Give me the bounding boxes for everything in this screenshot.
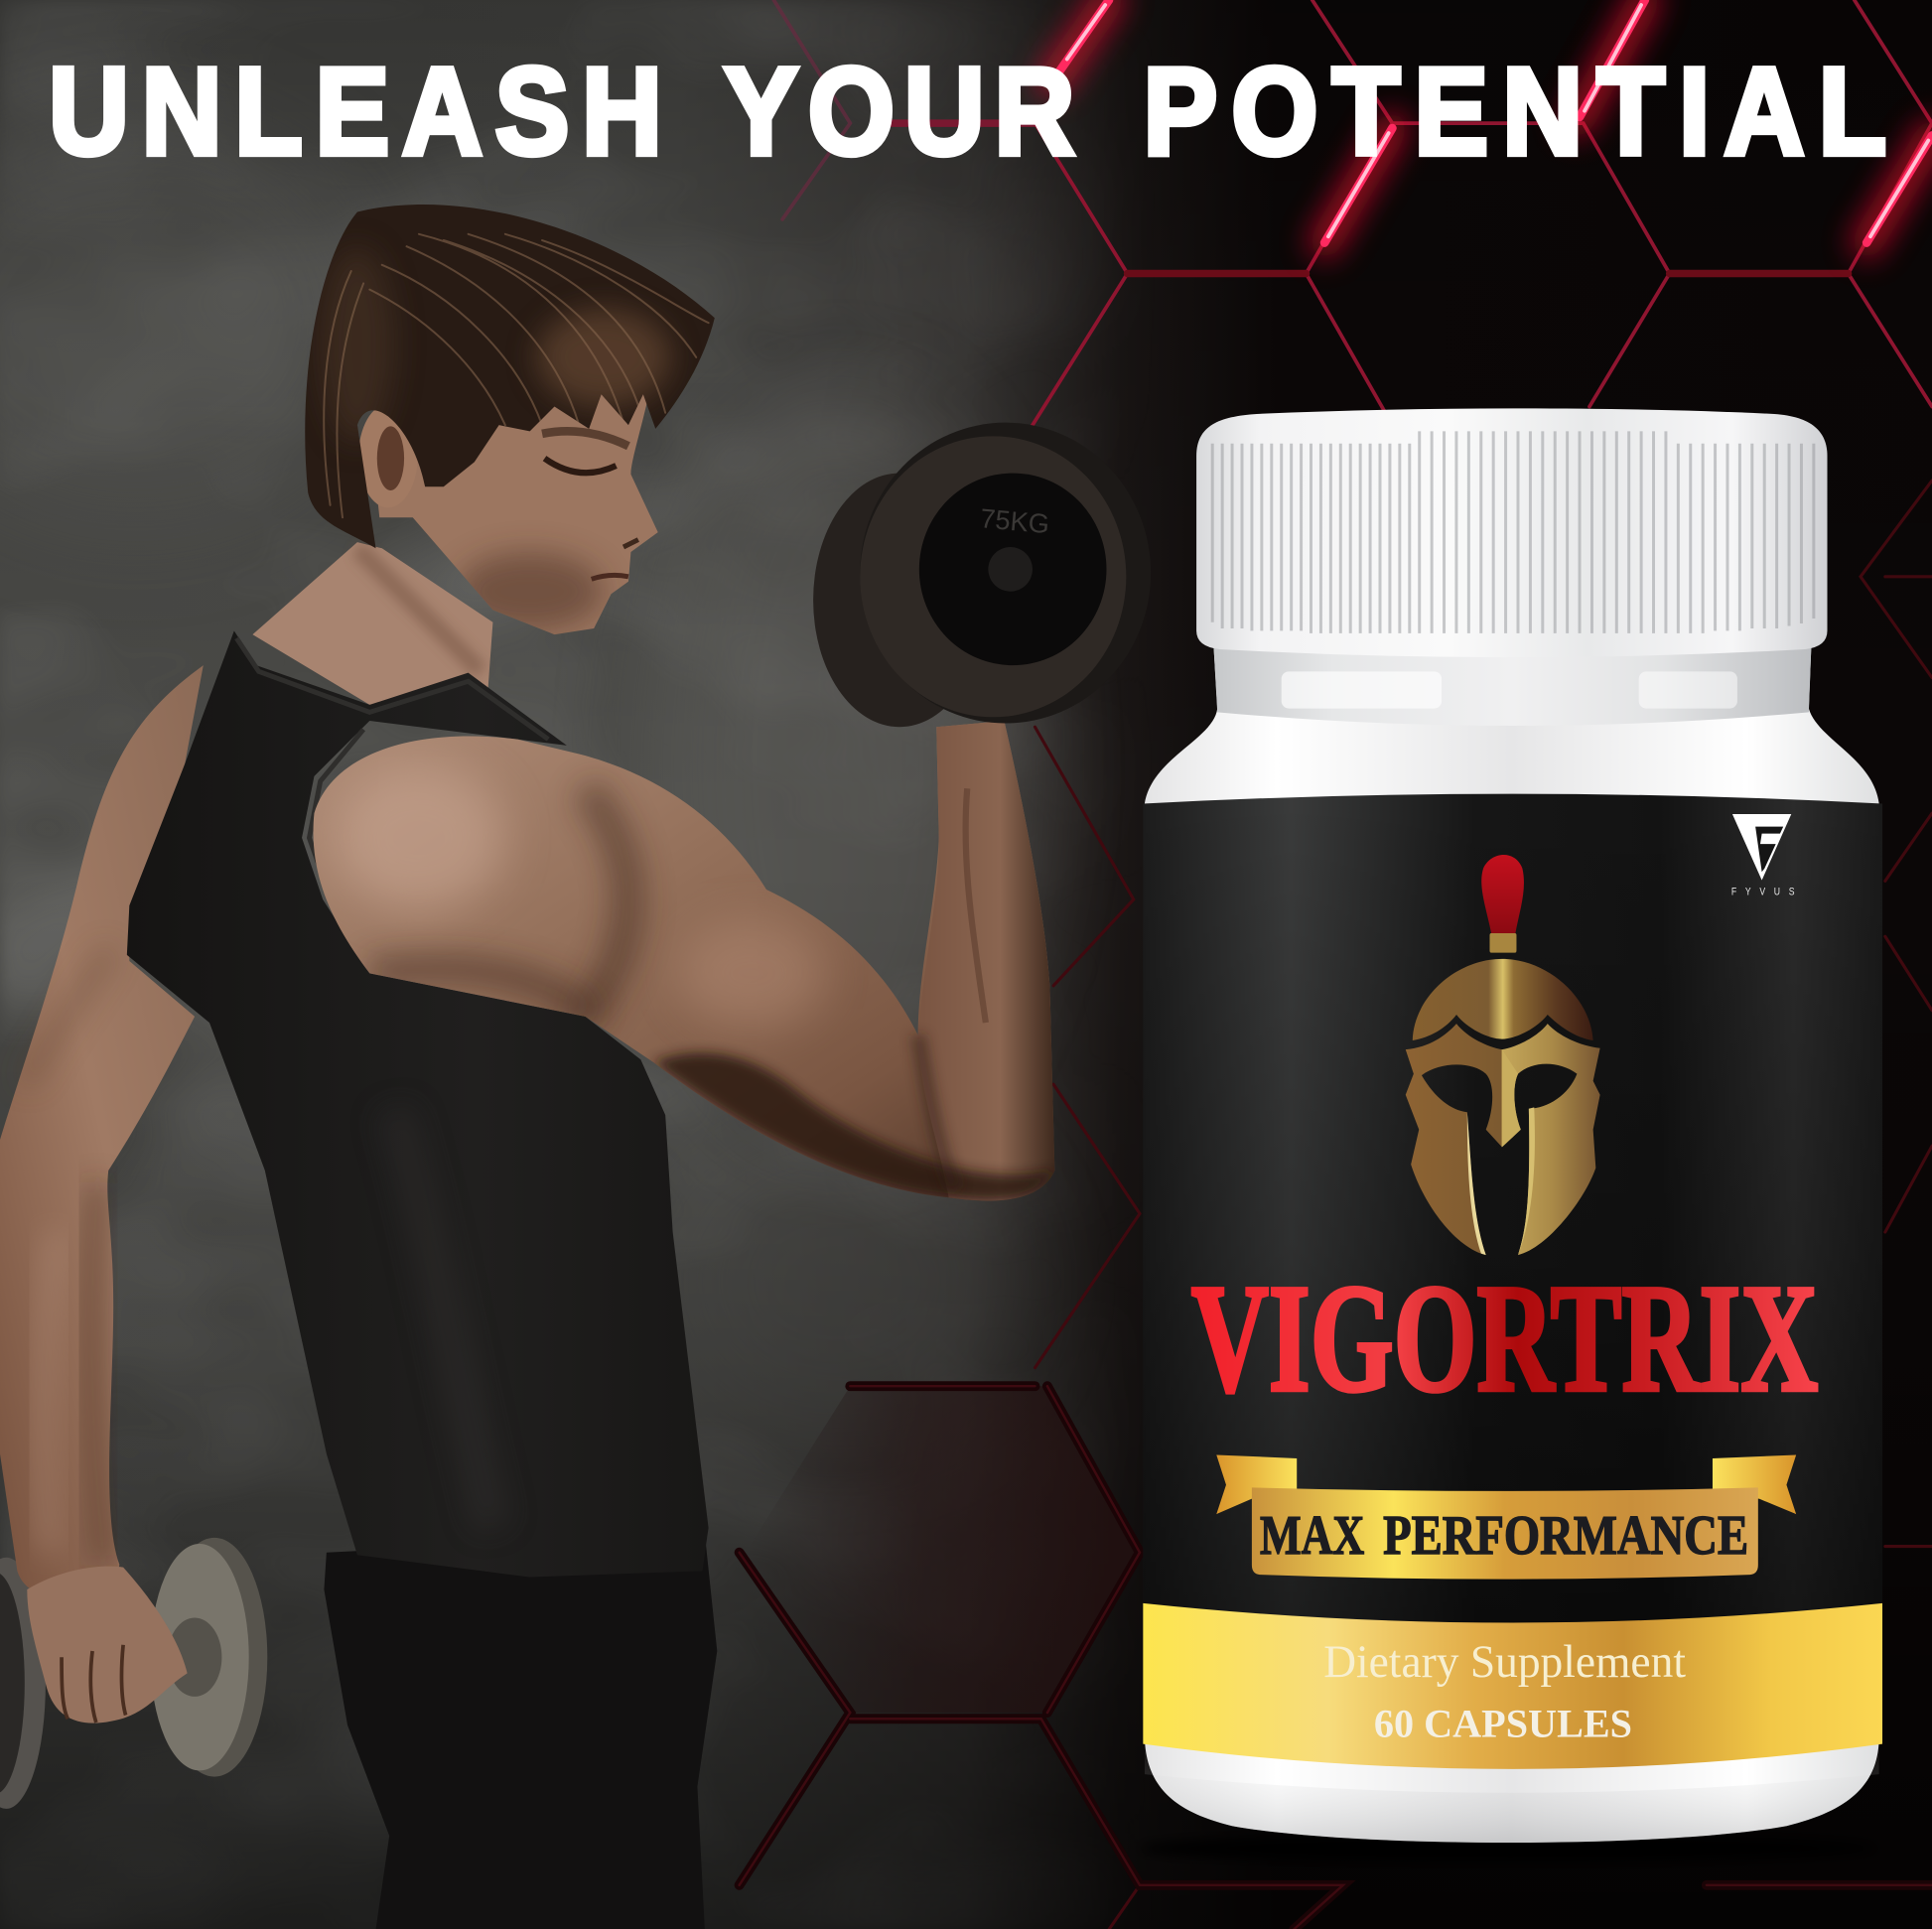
icon: spartan helmet — [1406, 855, 1600, 1255]
lower dumbbell — [0, 1538, 267, 1809]
hair — [305, 205, 715, 548]
title word 2: YOUR — [724, 44, 1074, 181]
flexed right arm — [314, 721, 1054, 1201]
neck — [1213, 647, 1811, 726]
brand mark: FYVUS: FYVUS — [1731, 886, 1795, 898]
upper dumbbell — [813, 423, 1151, 727]
hexagon wall lines — [740, 0, 1932, 1929]
brand mark: FYVUS — [1731, 814, 1795, 898]
capsule count: 60 CAPSULES — [1374, 1702, 1632, 1746]
ribbon word: MAX: MAX — [1260, 1504, 1364, 1566]
black label panel — [1143, 794, 1882, 1624]
label in local coordinates — [1143, 794, 1882, 1769]
supplement bottle — [1140, 408, 1882, 1862]
left arm and hand — [0, 665, 204, 1723]
cap — [1196, 408, 1828, 657]
title — [49, 44, 1886, 181]
bottle body — [1145, 647, 1879, 1843]
bottle base shading — [1145, 1737, 1879, 1843]
tank top — [127, 630, 709, 1578]
title word 3: POTENTIAL — [1144, 44, 1886, 181]
gold band — [1143, 1603, 1882, 1769]
ribbon banner — [1216, 1454, 1796, 1580]
man figure — [0, 205, 1054, 1929]
upper dumbbell: 75KG — [979, 502, 1050, 539]
neck and head — [252, 394, 658, 705]
title word 1: UNLEASH — [49, 44, 662, 181]
shorts — [324, 1534, 717, 1929]
product descriptor: Dietary Supplement — [1323, 1636, 1687, 1687]
ribbon word: PERFORMANCE: PERFORMANCE — [1383, 1504, 1748, 1566]
brand name: VIGORTRIX — [1191, 1253, 1818, 1425]
background: smoke and dark wall — [0, 0, 1196, 1929]
neon glowing lines — [1053, 0, 1932, 242]
bottle shadow glow — [1140, 1834, 1879, 1862]
